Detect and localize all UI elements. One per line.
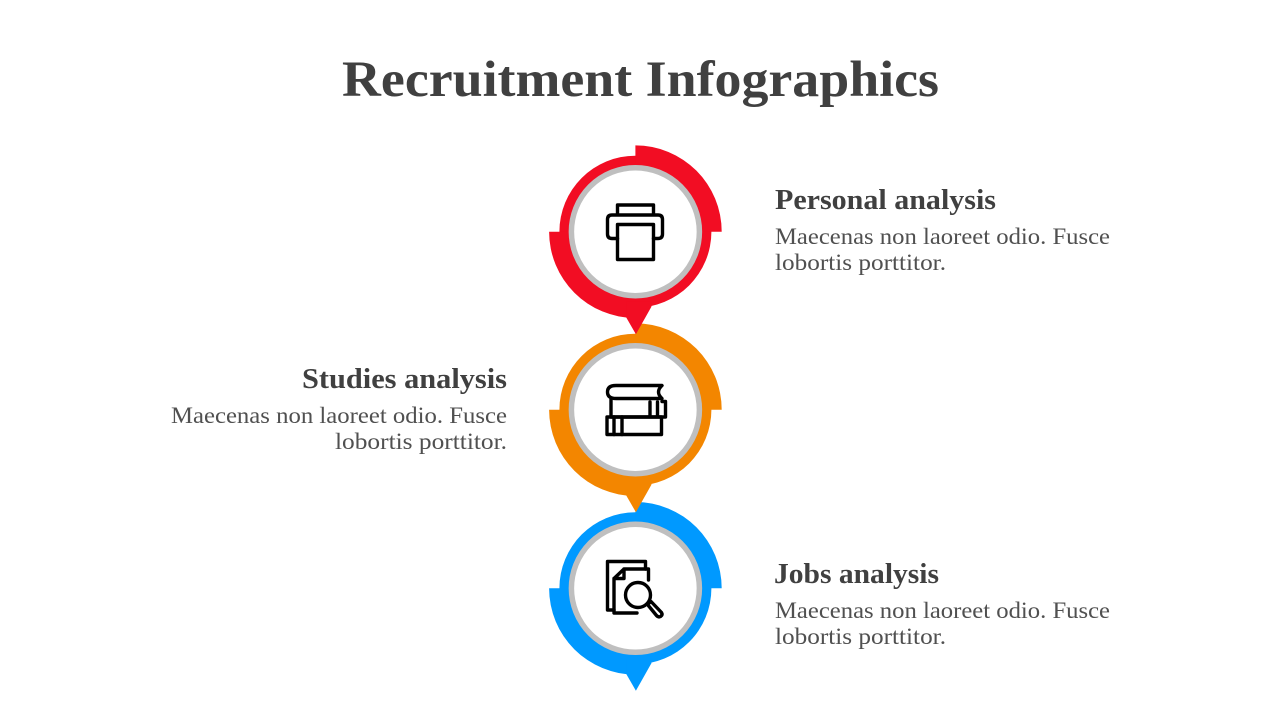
text block: personal analysis — [775, 184, 1110, 275]
body: studies analysis line 1: Maecenas non laoreet odio. Fusce — [171, 403, 507, 428]
panel: orange marker ring — [549, 323, 722, 512]
heading: personal analysis: Personal analysis — [775, 184, 996, 216]
icon: stack of books — [607, 386, 666, 434]
text block: studies analysis — [171, 363, 507, 454]
heading: jobs analysis: Jobs analysis — [774, 558, 939, 590]
title: Recruitment Infographics — [342, 52, 939, 108]
icon: documents and magnifier — [608, 562, 662, 617]
heading: studies analysis: Studies analysis — [302, 363, 507, 395]
body: studies analysis line 2: lobortis porttitor. — [335, 429, 507, 454]
panel: red marker ring — [549, 145, 722, 334]
panel: blue marker ring — [549, 502, 722, 691]
body: personal analysis line 1: Maecenas non laoreet odio. Fusce — [775, 224, 1110, 249]
body: jobs analysis line 2: lobortis porttitor. — [775, 624, 946, 649]
body: personal analysis line 2: lobortis porttitor. — [775, 250, 946, 275]
text block: jobs analysis — [774, 558, 1110, 649]
body: jobs analysis line 1: Maecenas non laoreet odio. Fusce — [775, 598, 1110, 623]
icon: printer — [608, 205, 662, 260]
